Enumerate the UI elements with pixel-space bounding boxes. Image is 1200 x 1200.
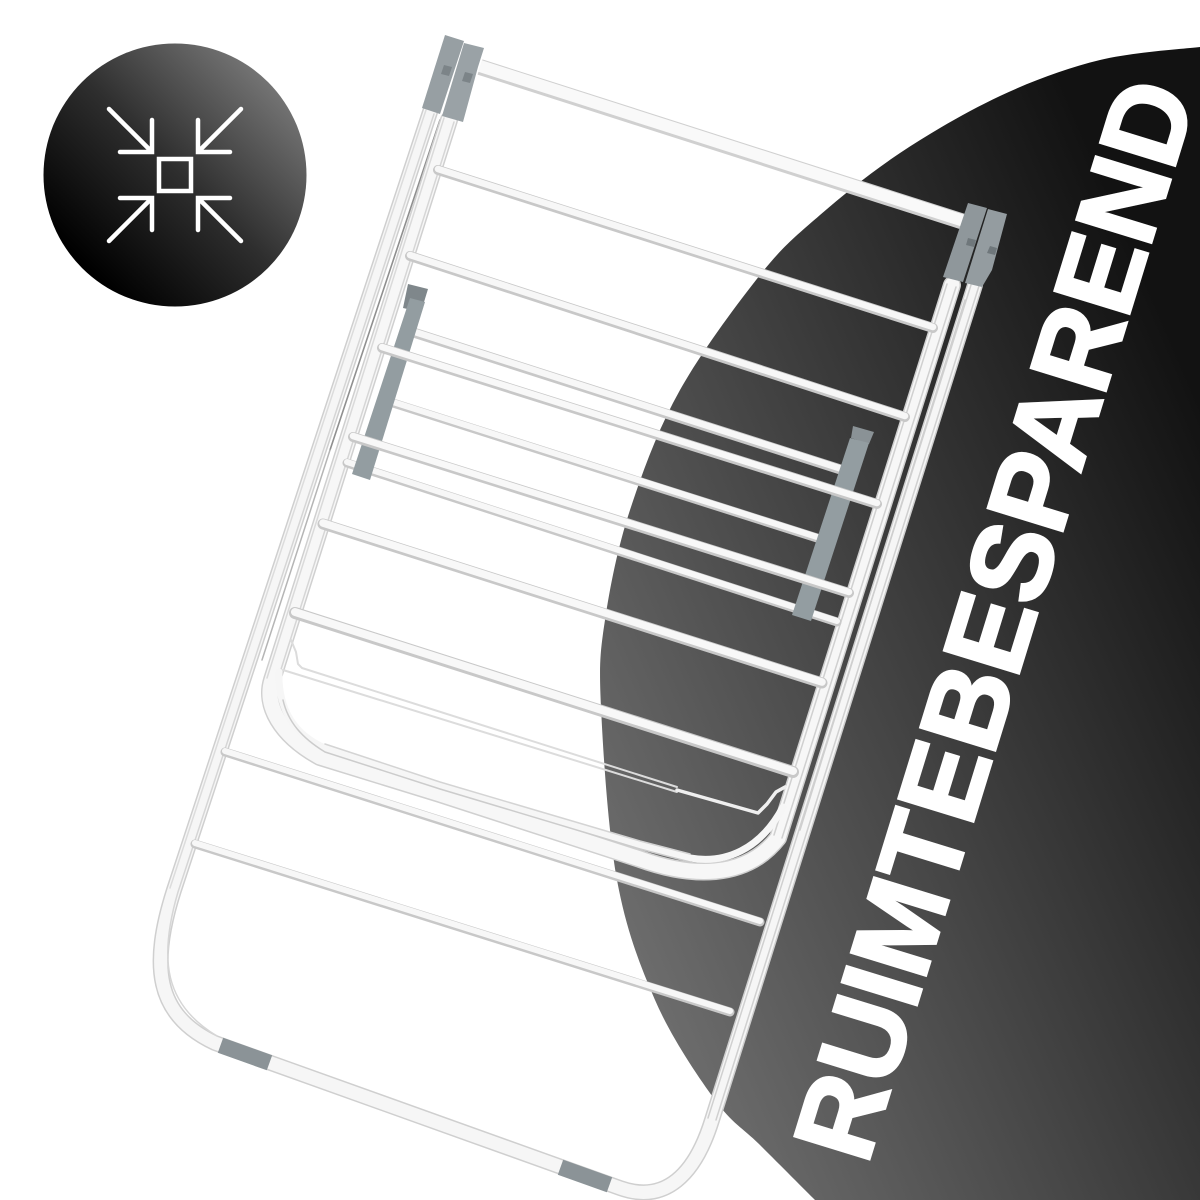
rung 2 <box>410 255 905 417</box>
grey end caps, top left <box>422 35 484 122</box>
rung 3 <box>382 347 877 504</box>
lower rung 1 <box>225 751 760 922</box>
rung 1 <box>438 169 933 328</box>
outer frame tube <box>161 110 979 1192</box>
wire hanger <box>283 640 785 813</box>
grey foot, right <box>558 1160 612 1192</box>
left grey bracket <box>352 284 428 480</box>
grey end caps, top right <box>943 203 1007 287</box>
panel: dark curved background <box>600 47 1200 1200</box>
top bar <box>480 66 964 222</box>
grey foot, left <box>218 1038 272 1070</box>
rung 5 <box>323 523 822 683</box>
rail shadow lines <box>262 120 965 830</box>
inner folding frame <box>267 118 956 872</box>
inner frame upper tube <box>279 672 783 862</box>
rung 4 <box>353 436 849 593</box>
inner rung B <box>393 402 817 538</box>
lower rung 2 <box>195 843 730 1012</box>
right grey bracket <box>792 426 874 621</box>
rung 6 <box>295 612 793 772</box>
inner rung C <box>347 462 837 622</box>
inner rung A <box>415 332 842 470</box>
icon: compress arrows in circle <box>44 44 306 306</box>
drying rack <box>161 35 1007 1192</box>
